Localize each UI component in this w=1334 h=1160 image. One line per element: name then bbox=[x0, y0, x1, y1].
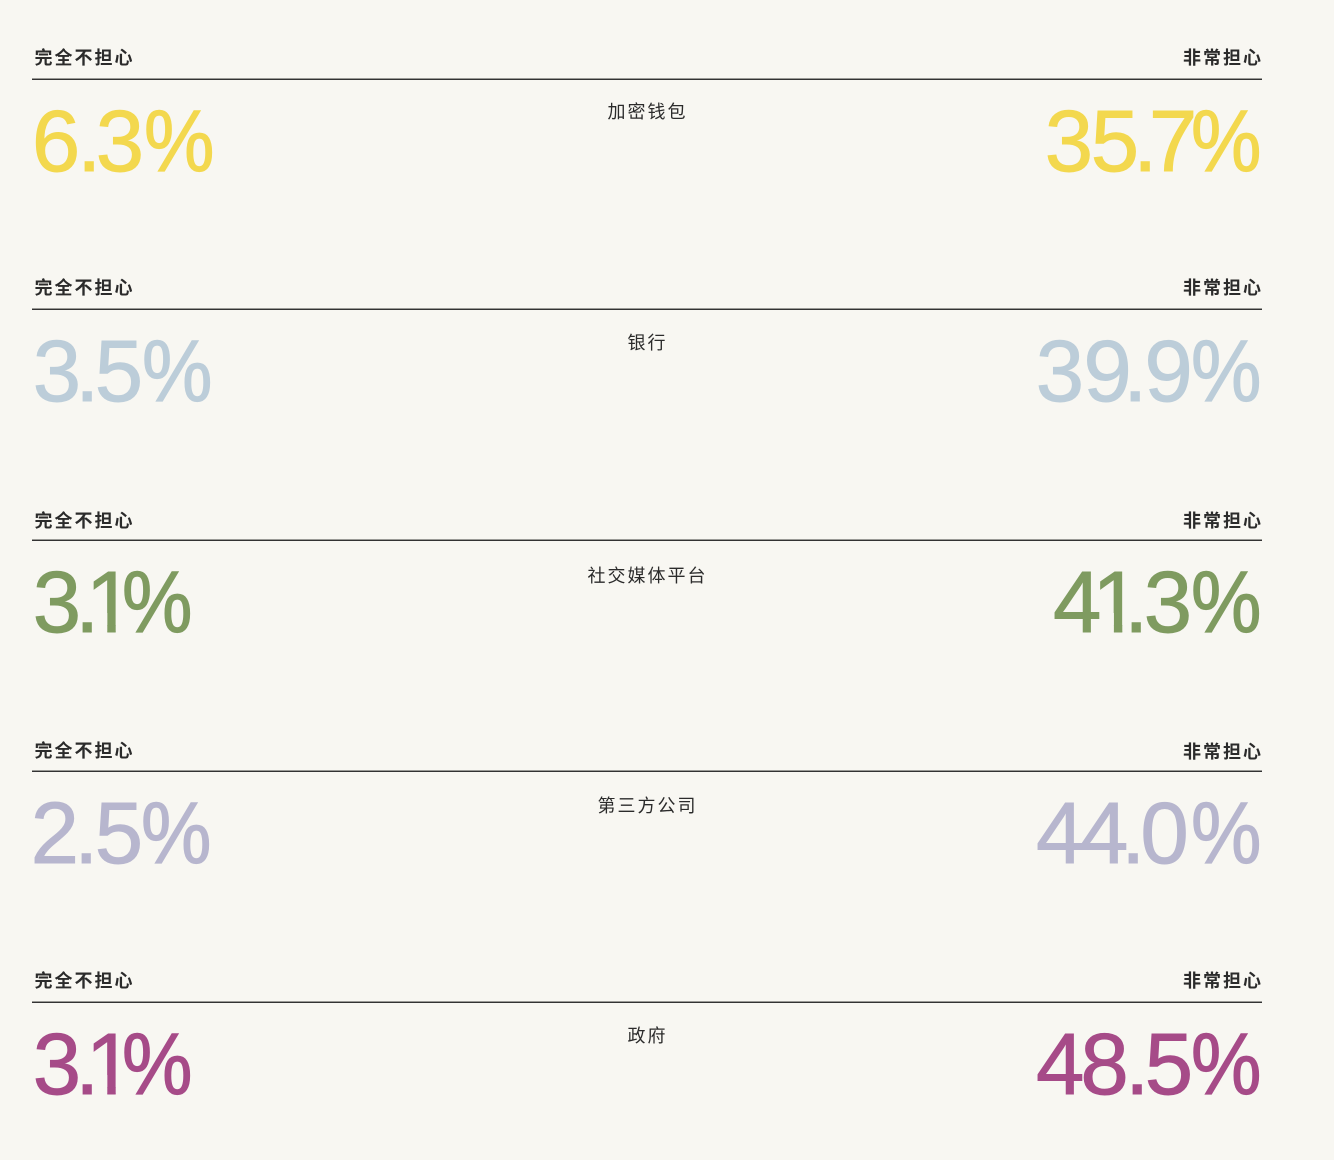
right scale label: 非常担心 bbox=[1183, 278, 1263, 298]
right percentage: % bbox=[1191, 554, 1261, 651]
right percentage bbox=[1053, 554, 1261, 651]
right percentage: . bbox=[1133, 93, 1157, 190]
left percentage: . bbox=[74, 785, 98, 882]
panel: government bbox=[32, 971, 1263, 1113]
left percentage: 1 bbox=[86, 554, 134, 651]
category label: 政府 bbox=[628, 1026, 668, 1046]
left percentage: 3 bbox=[33, 554, 81, 651]
right percentage: 4 bbox=[1080, 785, 1128, 882]
left percentage: . bbox=[75, 554, 99, 651]
right percentage: 7 bbox=[1149, 93, 1197, 190]
left percentage bbox=[33, 1016, 192, 1113]
left percentage: 5 bbox=[95, 785, 143, 882]
left percentage: 2 bbox=[31, 785, 79, 882]
left percentage: . bbox=[75, 323, 99, 420]
right scale label: 非常担心 bbox=[1183, 742, 1263, 762]
left percentage: 5 bbox=[95, 323, 143, 420]
left percentage: . bbox=[75, 1016, 99, 1113]
left percentage: 3 bbox=[33, 1016, 81, 1113]
category label: 社交媒体平台 bbox=[588, 566, 708, 586]
left percentage: 1 bbox=[86, 1016, 134, 1113]
right percentage: 9 bbox=[1083, 323, 1132, 420]
right percentage: 5 bbox=[1145, 1016, 1193, 1113]
left scale label: 完全不担心 bbox=[34, 48, 134, 68]
category label: 第三方公司 bbox=[598, 796, 698, 816]
left percentage bbox=[32, 93, 214, 190]
left percentage: % bbox=[142, 323, 212, 420]
panel: banks bbox=[32, 278, 1263, 420]
left scale label: 完全不担心 bbox=[34, 741, 134, 761]
right percentage: 3 bbox=[1036, 323, 1084, 420]
right percentage bbox=[1045, 93, 1261, 190]
right percentage: % bbox=[1191, 1016, 1261, 1113]
right scale label: 非常担心 bbox=[1183, 511, 1263, 531]
right percentage: % bbox=[1191, 93, 1261, 190]
left percentage bbox=[33, 323, 212, 420]
right percentage bbox=[1036, 1016, 1261, 1113]
right percentage: % bbox=[1191, 785, 1261, 882]
left percentage bbox=[31, 785, 211, 882]
left scale label: 完全不担心 bbox=[34, 511, 134, 531]
right scale label: 非常担心 bbox=[1183, 48, 1263, 68]
left scale label: 完全不担心 bbox=[34, 971, 134, 991]
right percentage bbox=[1036, 323, 1261, 420]
right percentage: 5 bbox=[1091, 93, 1139, 190]
panel: third-party companies bbox=[31, 741, 1263, 882]
right scale label: 非常担心 bbox=[1183, 971, 1263, 991]
right percentage: 1 bbox=[1092, 554, 1141, 651]
left percentage: 3 bbox=[33, 323, 81, 420]
right percentage: 3 bbox=[1144, 554, 1192, 651]
panel: social media platforms bbox=[32, 511, 1263, 651]
right percentage bbox=[1036, 785, 1261, 882]
right percentage: 0 bbox=[1140, 785, 1189, 882]
panel: crypto wallet bbox=[32, 48, 1263, 190]
left percentage: % bbox=[144, 93, 214, 190]
left percentage: 3 bbox=[96, 93, 144, 190]
left percentage: 6 bbox=[32, 93, 80, 190]
right percentage: 8 bbox=[1080, 1016, 1129, 1113]
right percentage: 3 bbox=[1045, 93, 1093, 190]
left percentage: % bbox=[122, 554, 192, 651]
right percentage: 9 bbox=[1144, 323, 1193, 420]
right percentage: 4 bbox=[1053, 554, 1101, 651]
right percentage: . bbox=[1124, 554, 1148, 651]
category label: 银行 bbox=[628, 333, 668, 353]
left percentage: % bbox=[141, 785, 211, 882]
right percentage: . bbox=[1123, 323, 1147, 420]
left percentage: . bbox=[77, 93, 101, 190]
left percentage bbox=[33, 554, 192, 651]
right percentage: 4 bbox=[1036, 1016, 1084, 1113]
left scale label: 完全不担心 bbox=[34, 278, 134, 298]
category label: 加密钱包 bbox=[608, 102, 688, 122]
right percentage: . bbox=[1125, 1016, 1149, 1113]
left percentage: % bbox=[122, 1016, 192, 1113]
right percentage: . bbox=[1121, 785, 1145, 882]
right percentage: 4 bbox=[1036, 785, 1084, 882]
right percentage: % bbox=[1191, 323, 1261, 420]
